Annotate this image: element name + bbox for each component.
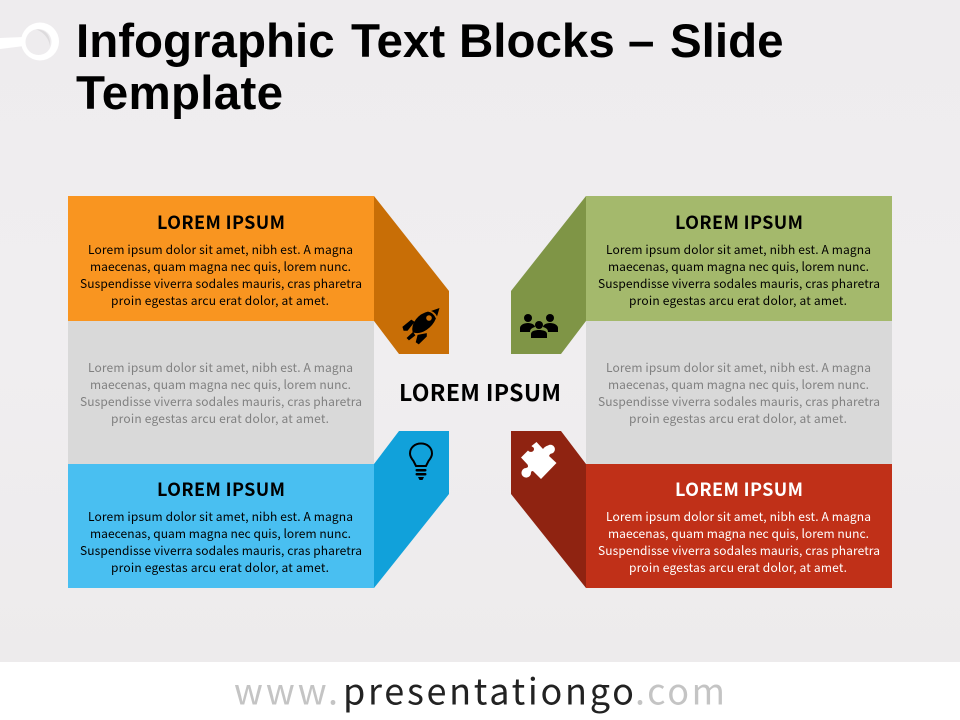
text block: middle-left: Suspendisse viverra sodales mauris, cras pharetra: [80, 393, 362, 410]
panel: middle-right grey block: [586, 321, 892, 464]
icon: people: [520, 314, 558, 338]
heading: top-left: LOREM IPSUM: [157, 209, 285, 235]
icon: pin ring marker: [0, 22, 59, 60]
title: Text: [351, 15, 445, 68]
text block: bottom-left: proin egestas arcu erat dolor, at amet.: [111, 559, 329, 576]
icon: rocket: [403, 308, 440, 344]
text block: top-right: Lorem ipsum dolor sit amet, nibh est. A magna: [606, 241, 871, 258]
text block: bottom-left: [80, 508, 362, 576]
text block: top-left: Suspendisse viverra sodales mauris, cras pharetra: [80, 275, 362, 292]
title: Infographic: [76, 15, 335, 68]
panel: bottom-left blue block: [68, 431, 449, 588]
text block: middle-left: Lorem ipsum dolor sit amet, nibh est. A magna: [88, 359, 353, 376]
text block: bottom-left: Suspendisse viverra sodales mauris, cras pharetra: [80, 542, 362, 559]
text block: bottom-left: maecenas, quam magna nec quis, lorem nunc.: [90, 525, 351, 542]
text block: middle-right: proin egestas arcu erat dolor, at amet.: [629, 410, 847, 427]
icon: light bulb: [410, 444, 432, 480]
title: Slide: [670, 15, 784, 68]
panel: bottom-right red block: [511, 431, 892, 588]
text block: top-left: [80, 241, 362, 309]
text block: bottom-right: [598, 508, 880, 576]
title: [76, 15, 784, 120]
panel: top-left orange block: [68, 196, 449, 354]
text block: top-left: maecenas, quam magna nec quis, lorem nunc.: [90, 258, 351, 275]
text block: top-right: maecenas, quam magna nec quis, lorem nunc.: [608, 258, 869, 275]
text block: bottom-right: maecenas, quam magna nec quis, lorem nunc.: [608, 525, 869, 542]
text block: middle-left: maecenas, quam magna nec quis, lorem nunc.: [90, 376, 351, 393]
text block: middle-right: Lorem ipsum dolor sit amet, nibh est. A magna: [606, 359, 871, 376]
footer white band: [0, 662, 960, 720]
text block: top-left: proin egestas arcu erat dolor, at amet.: [111, 292, 329, 309]
title: Template: [76, 67, 283, 120]
icon: puzzle piece: [521, 442, 556, 479]
text block: top-left: Lorem ipsum dolor sit amet, nibh est. A magna: [88, 241, 353, 258]
footer website address: www.: [234, 664, 338, 716]
footer website address: .com: [635, 664, 725, 716]
heading: bottom-right: LOREM IPSUM: [675, 476, 803, 502]
title: –: [628, 15, 654, 68]
text block: middle-left: proin egestas arcu erat dolor, at amet.: [111, 410, 329, 427]
text block: top-right: [598, 241, 880, 309]
text block: top-right: Suspendisse viverra sodales mauris, cras pharetra: [598, 275, 880, 292]
heading: bottom-left: LOREM IPSUM: [157, 476, 285, 502]
title: Blocks: [459, 15, 615, 68]
footer website address: [234, 664, 725, 716]
panel: middle-left grey block: [68, 321, 374, 464]
heading: top-right: LOREM IPSUM: [675, 209, 803, 235]
text block: bottom-right: proin egestas arcu erat dolor, at amet.: [629, 559, 847, 576]
text block: bottom-right: Lorem ipsum dolor sit amet, nibh est. A magna: [606, 508, 871, 525]
text block: middle-right: Suspendisse viverra sodales mauris, cras pharetra: [598, 393, 880, 410]
text block: top-right: proin egestas arcu erat dolor, at amet.: [629, 292, 847, 309]
text block: middle-left: [80, 359, 362, 427]
text block: middle-right: [598, 359, 880, 427]
text block: bottom-left: Lorem ipsum dolor sit amet, nibh est. A magna: [88, 508, 353, 525]
text block: middle-right: maecenas, quam magna nec quis, lorem nunc.: [608, 376, 869, 393]
center heading: LOREM IPSUM: [399, 374, 561, 408]
panel: top-right green block: [511, 196, 892, 354]
footer website address: presentationgo: [343, 664, 634, 716]
text block: bottom-right: Suspendisse viverra sodales mauris, cras pharetra: [598, 542, 880, 559]
